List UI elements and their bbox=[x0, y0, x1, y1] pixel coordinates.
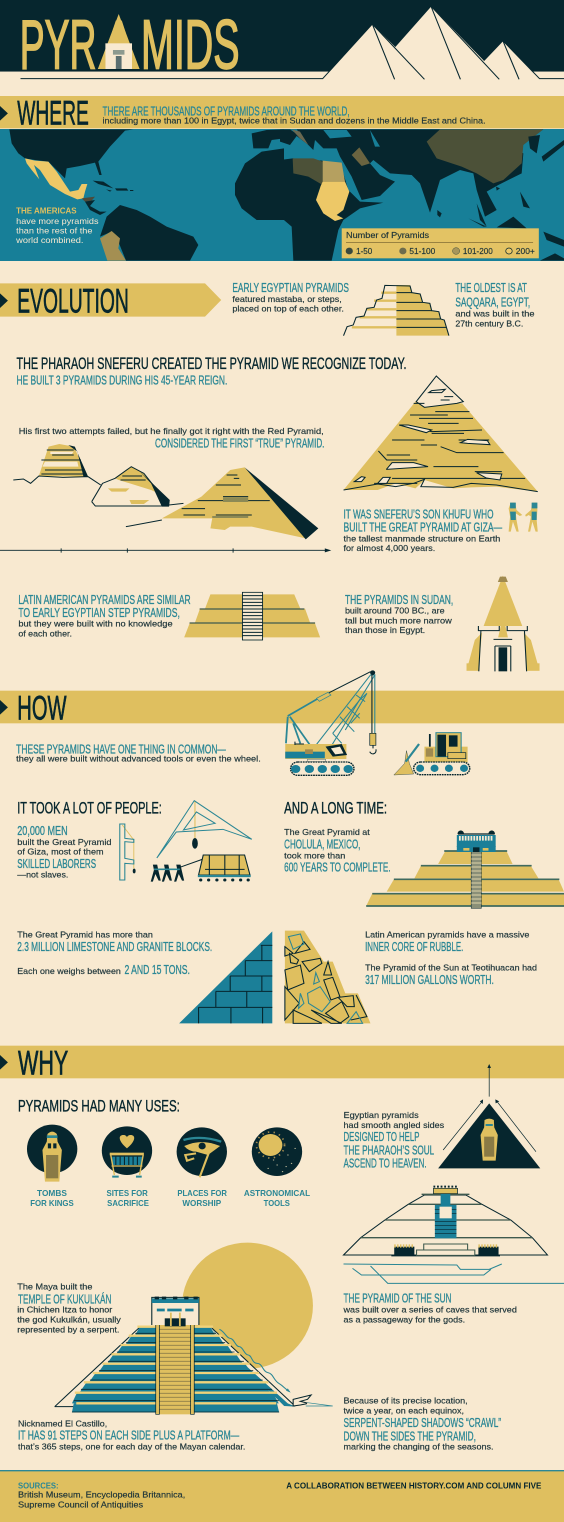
cholula text: 600 YEARS TO COMPLETE. bbox=[284, 860, 391, 875]
red pyramid text: His first two attempts failed, but he finally got it right with the Red Pyramid, bbox=[19, 426, 324, 436]
title: A bbox=[100, 7, 137, 84]
people text: built the Great Pyramid bbox=[17, 837, 112, 847]
where text: including more than 100 in Egypt, twice that in Sudan and dozens in the Middle East and China. bbox=[103, 116, 486, 126]
blocks text: 2 AND 15 TONS. bbox=[124, 962, 190, 977]
section marker bbox=[0, 700, 8, 715]
legend: 101-200 bbox=[463, 246, 493, 256]
north america bbox=[9, 129, 133, 178]
americas text: world combined. bbox=[15, 235, 83, 245]
caves bbox=[344, 1264, 564, 1283]
cholula pyramid bbox=[366, 830, 564, 908]
serpent head bbox=[293, 1395, 311, 1406]
south america bbox=[100, 205, 198, 261]
how text: THESE PYRAMIDS HAVE ONE THING IN COMMON— bbox=[16, 742, 226, 756]
how text: they all were built without advanced tools or even the wheel. bbox=[16, 754, 261, 764]
castillo text: IT HAS 91 STEPS ON EACH SIDE PLUS A PLATFORM— bbox=[18, 1428, 240, 1442]
where text bbox=[103, 104, 486, 126]
uses heading: PYRAMIDS HAD MANY USES: bbox=[18, 1097, 180, 1116]
icon labels: TOOLS bbox=[264, 1198, 290, 1208]
kukulkan text: The Maya built the bbox=[17, 1282, 93, 1292]
icon: astronomical bbox=[252, 1127, 302, 1176]
people text: of Giza, most of them bbox=[17, 847, 104, 856]
sun pyramid text: as a passageway for the gods. bbox=[344, 1315, 465, 1324]
where text: THERE ARE THOUSANDS OF PYRAMIDS AROUND THE WORLD, bbox=[103, 104, 350, 118]
step pyramid bbox=[344, 285, 449, 336]
legend: 1-50 bbox=[356, 246, 373, 256]
americas text: than the rest of the bbox=[16, 226, 93, 235]
cholula text: The Great Pyramid at bbox=[284, 827, 371, 837]
how band bbox=[0, 691, 564, 723]
west africa bbox=[235, 148, 284, 220]
peru bbox=[100, 231, 126, 261]
caribbean bbox=[93, 181, 133, 192]
rubble text: INNER CORE OF RUBBLE. bbox=[365, 939, 463, 954]
title: PYR bbox=[20, 7, 96, 84]
sudan pyramid bbox=[467, 576, 540, 671]
heading: evolution: EVOLUTION bbox=[17, 283, 129, 320]
latin american text bbox=[18, 592, 191, 638]
khufu text bbox=[344, 507, 503, 553]
section: header and where bbox=[0, 0, 564, 132]
latin american text: but they were built with no knowledge bbox=[18, 619, 173, 629]
sudan text bbox=[345, 592, 453, 635]
icon: worship bbox=[177, 1127, 227, 1177]
soul text: THE PHARAOH’S SOUL bbox=[344, 1143, 434, 1157]
blocks text bbox=[17, 930, 212, 977]
sources: British Museum, Encyclopedia Britannica, bbox=[18, 1490, 185, 1500]
iberia bbox=[252, 129, 284, 148]
tool: t-square bbox=[120, 824, 136, 880]
kukulkan text bbox=[17, 1282, 122, 1334]
people text: —not slaves. bbox=[17, 870, 68, 880]
time heading: AND A LONG TIME: bbox=[284, 799, 387, 817]
icon labels bbox=[30, 1188, 311, 1208]
equinox text: twice a year, on each equinox, bbox=[344, 1406, 464, 1416]
sources: SOURCES: bbox=[18, 1481, 59, 1490]
castillo text: that’s 365 steps, one for each day of the Mayan calendar. bbox=[18, 1442, 245, 1451]
sun disc bbox=[182, 1243, 313, 1369]
sources bbox=[18, 1481, 185, 1510]
section: evolution bbox=[0, 280, 538, 553]
kukulkan text: TEMPLE OF KUKULKÁN bbox=[18, 1292, 112, 1306]
soul text: had smooth angled sides bbox=[344, 1120, 444, 1130]
soul text: DESIGNED TO HELP bbox=[344, 1129, 420, 1144]
equinox text: marking the changing of the seasons. bbox=[344, 1442, 494, 1452]
bulldozer bbox=[394, 733, 470, 775]
stepped tiers bbox=[72, 1326, 279, 1412]
china bbox=[427, 129, 543, 183]
legend bbox=[342, 228, 539, 258]
early egyptian text: EARLY EGYPTIAN PYRAMIDS bbox=[232, 280, 349, 295]
icon labels: WORSHIP bbox=[182, 1198, 221, 1208]
timeline arrow bbox=[0, 548, 331, 553]
people text: SKILLED LABORERS bbox=[17, 856, 96, 871]
rubble text bbox=[365, 930, 537, 987]
tool: a-frame bbox=[157, 801, 252, 858]
heading: why: WHY bbox=[18, 1045, 68, 1082]
legend: 200+ bbox=[516, 246, 535, 256]
americas text: THE AMERICAS bbox=[16, 206, 77, 216]
section marker bbox=[0, 1055, 8, 1070]
latin american step pyramid bbox=[184, 592, 320, 640]
icon: sacrifice bbox=[102, 1126, 152, 1177]
first pyramid bbox=[13, 444, 101, 485]
icon labels: ASTRONOMICAL bbox=[244, 1188, 311, 1198]
americas text bbox=[15, 206, 99, 245]
legend: Number of Pyramids bbox=[346, 230, 429, 240]
cholula text: CHOLULA, MEXICO, bbox=[284, 837, 360, 851]
temple of kukulkan bbox=[55, 1297, 333, 1414]
sun pyramid text: THE PYRAMID OF THE SUN bbox=[344, 1291, 451, 1306]
africa bbox=[280, 158, 383, 261]
how text bbox=[16, 742, 261, 764]
people heading: IT TOOK A LOT OF PEOPLE: bbox=[17, 799, 162, 817]
header pyramids bbox=[0, 6, 564, 95]
egypt bbox=[323, 161, 345, 182]
blocks text: The Great Pyramid has more than bbox=[17, 930, 153, 939]
castillo text: Nicknamed El Castillo, bbox=[18, 1419, 107, 1428]
italy bbox=[292, 129, 308, 145]
cholula text: took more than bbox=[284, 851, 346, 860]
heading: how: HOW bbox=[17, 690, 67, 727]
soul text: ASCEND TO HEAVEN. bbox=[344, 1156, 427, 1171]
map: western half bbox=[9, 129, 284, 261]
latin american text: of each other. bbox=[18, 629, 72, 638]
section: why bbox=[0, 1045, 564, 1256]
sudan text: built around 700 BC., are bbox=[345, 606, 445, 616]
cholula text bbox=[284, 827, 391, 875]
blocks text: Each one weighs between bbox=[17, 966, 121, 976]
sudan text: tall but much more narrow bbox=[345, 616, 453, 625]
oldest text: and was built in the bbox=[455, 309, 535, 319]
early egyptian text: featured mastaba, or steps, bbox=[232, 294, 342, 304]
sneferu heading: HE BUILT 3 PYRAMIDS DURING HIS 45-YEAR REIGN. bbox=[17, 373, 227, 387]
heading: where: WHERE bbox=[17, 95, 89, 132]
kukulkan text: represented by a serpent. bbox=[17, 1325, 119, 1334]
mexico bbox=[25, 158, 87, 199]
people text bbox=[17, 823, 112, 880]
sudan bbox=[316, 182, 349, 221]
icon: tombs bbox=[27, 1125, 77, 1182]
soul text: Egyptian pyramids bbox=[344, 1110, 419, 1120]
crane bbox=[285, 670, 376, 775]
iraq bbox=[352, 147, 370, 166]
sun pyramid text: was built over a series of caves that served bbox=[342, 1305, 517, 1315]
rubble text: The Pyramid of the Sun at Teotihuacan had bbox=[365, 963, 537, 972]
early egyptian text bbox=[232, 280, 349, 313]
central america bbox=[85, 200, 107, 215]
map overlays bbox=[15, 206, 539, 258]
icon labels: SITES FOR bbox=[106, 1188, 148, 1198]
sun pyramid text bbox=[342, 1291, 517, 1324]
pyramid of the sun bbox=[344, 1187, 547, 1256]
oldest text bbox=[455, 280, 535, 328]
icon labels: SACRIFICE bbox=[107, 1198, 149, 1208]
soul text bbox=[344, 1110, 444, 1171]
icon labels: FOR KINGS bbox=[30, 1198, 74, 1208]
workers pulling sled bbox=[151, 855, 251, 882]
europe and asia bbox=[280, 129, 543, 217]
title bbox=[20, 7, 240, 84]
icon labels: TOMBS bbox=[37, 1188, 67, 1198]
libya bbox=[293, 158, 323, 185]
oldest text: 27th century B.C. bbox=[455, 319, 523, 328]
icon labels: PLACES FOR bbox=[177, 1188, 227, 1198]
where band bbox=[0, 96, 564, 128]
section: people and time bbox=[17, 799, 564, 1023]
section: latin and sudan, how bbox=[0, 576, 564, 775]
sources: Supreme Council of Antiquities bbox=[18, 1500, 143, 1510]
seas bbox=[290, 129, 380, 147]
latin american text: LATIN AMERICAN PYRAMIDS ARE SIMILAR bbox=[18, 592, 191, 607]
sudan text: THE PYRAMIDS IN SUDAN, bbox=[345, 592, 453, 607]
section marker bbox=[0, 106, 8, 121]
equinox text: Because of its precise location, bbox=[344, 1396, 468, 1406]
brick triangle bbox=[179, 931, 272, 1023]
blocks text: 2.3 MILLION LIMESTONE AND GRANITE BLOCKS. bbox=[17, 939, 212, 954]
soul pyramid bbox=[438, 1064, 540, 1168]
guatemala bbox=[82, 197, 95, 202]
rubble core bbox=[285, 931, 370, 1023]
header band bbox=[0, 0, 564, 72]
people text: 20,000 MEN bbox=[17, 823, 68, 838]
latin american text: TO EARLY EGYPTIAN STEP PYRAMIDS, bbox=[18, 605, 180, 620]
evolution banner bbox=[0, 283, 221, 317]
sneferu heading bbox=[17, 355, 406, 387]
icon: egyptian figures bbox=[509, 503, 538, 532]
serpent shadow bbox=[219, 1329, 290, 1392]
red pyramid text bbox=[19, 426, 324, 450]
asian islands bbox=[437, 135, 564, 261]
great pyramid bbox=[344, 376, 538, 492]
section: kukulkan and footer bbox=[0, 1243, 564, 1522]
kukulkan text: the god Kukulkán, usually bbox=[17, 1315, 122, 1324]
americas text: have more pyramids bbox=[16, 216, 99, 226]
world map bbox=[0, 129, 564, 261]
early egyptian text: placed on top of each other. bbox=[232, 304, 344, 313]
castillo text bbox=[18, 1419, 245, 1451]
map: eastern half bbox=[280, 129, 564, 261]
title: MIDS bbox=[141, 7, 240, 84]
equinox text: DOWN THE SIDES THE PYRAMID, bbox=[344, 1429, 476, 1443]
khufu text: for almost 4,000 years. bbox=[344, 543, 435, 553]
khufu text: the tallest manmade structure on Earth bbox=[344, 534, 501, 544]
footer bbox=[0, 1470, 564, 1522]
legend: 51-100 bbox=[409, 246, 436, 256]
why band bbox=[0, 1046, 564, 1078]
red pyramid text: CONSIDERED THE FIRST “TRUE” PYRAMID. bbox=[155, 436, 324, 450]
equinox text bbox=[344, 1396, 501, 1452]
sudan text: than those in Egypt. bbox=[345, 625, 425, 635]
section marker bbox=[0, 293, 8, 308]
second pyramid bbox=[92, 467, 183, 507]
red pyramid bbox=[126, 467, 318, 539]
rubble text: Latin American pyramids have a massive bbox=[365, 930, 530, 939]
kukulkan text: in Chichen Itza to honor bbox=[17, 1305, 112, 1314]
